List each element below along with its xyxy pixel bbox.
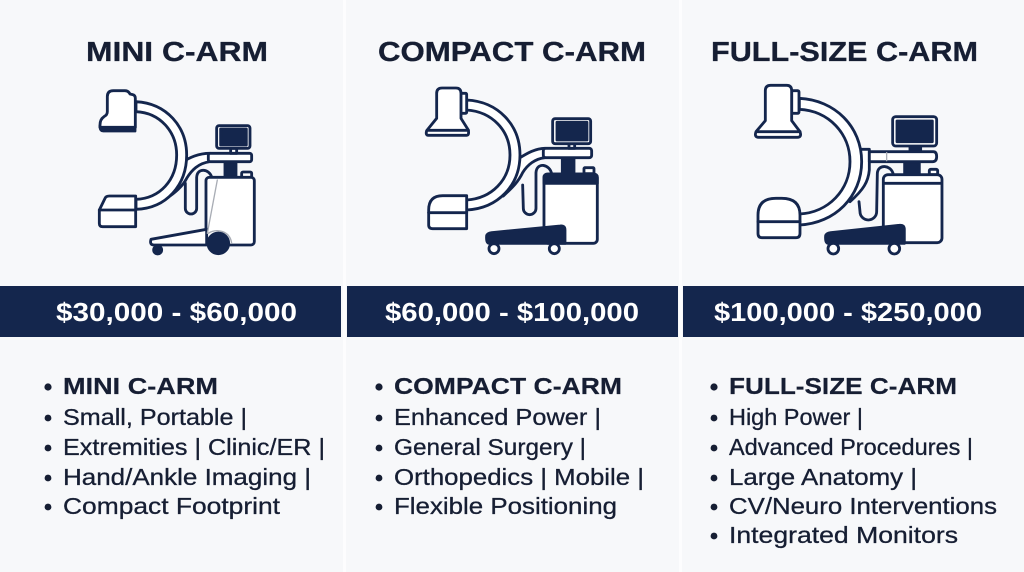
feature list: compact c-arm: Orthopedics | Mobile | — [394, 464, 644, 490]
icon: mini c-arm machine — [99, 91, 254, 254]
panel: mini c-arm — [0, 0, 343, 572]
feature list: compact c-arm — [375, 373, 644, 519]
feature list: full-size c-arm: CV/Neuro Interventions — [729, 493, 997, 519]
feature list: mini c-arm: Small, Portable | — [63, 404, 247, 430]
price band: full-size c-arm: $100,000 - $250,000 — [714, 297, 982, 327]
icon: full-size c-arm machine — [755, 85, 942, 254]
price band: full-size c-arm — [683, 286, 1024, 337]
feature list: full-size c-arm: Advanced Procedures | — [729, 434, 973, 460]
feature list: full-size c-arm — [710, 373, 997, 548]
feature list: compact c-arm: Enhanced Power | — [394, 404, 601, 430]
price band: compact c-arm — [347, 286, 678, 337]
price band: mini c-arm: $30,000 - $60,000 — [56, 297, 297, 327]
feature list: full-size c-arm: Integrated Monitors — [729, 522, 958, 548]
feature list: full-size c-arm: Large Anatomy | — [729, 464, 917, 490]
feature list: mini c-arm — [44, 373, 325, 519]
heading: compact c-arm: COMPACT C-ARM — [378, 36, 646, 67]
price band: mini c-arm — [0, 286, 341, 337]
icon: compact c-arm machine — [426, 88, 597, 254]
panel: full-size c-arm — [682, 0, 1024, 572]
feature list: compact c-arm: Flexible Positioning — [394, 493, 617, 519]
feature list: full-size c-arm: FULL-SIZE C-ARM — [729, 373, 957, 399]
feature list: compact c-arm: General Surgery | — [394, 434, 586, 460]
feature list: mini c-arm: Extremities | Clinic/ER | — [63, 434, 325, 460]
price band: compact c-arm: $60,000 - $100,000 — [385, 297, 639, 327]
feature list: mini c-arm: MINI C-ARM — [63, 373, 218, 399]
heading: mini c-arm: MINI C-ARM — [86, 36, 268, 67]
feature list: mini c-arm: Hand/Ankle Imaging | — [63, 464, 311, 490]
panel: compact c-arm — [346, 0, 679, 572]
feature list: compact c-arm: COMPACT C-ARM — [394, 373, 622, 399]
feature list: mini c-arm: Compact Footprint — [63, 493, 281, 519]
feature list: full-size c-arm: High Power | — [729, 404, 863, 430]
heading: full-size c-arm: FULL-SIZE C-ARM — [711, 36, 978, 67]
